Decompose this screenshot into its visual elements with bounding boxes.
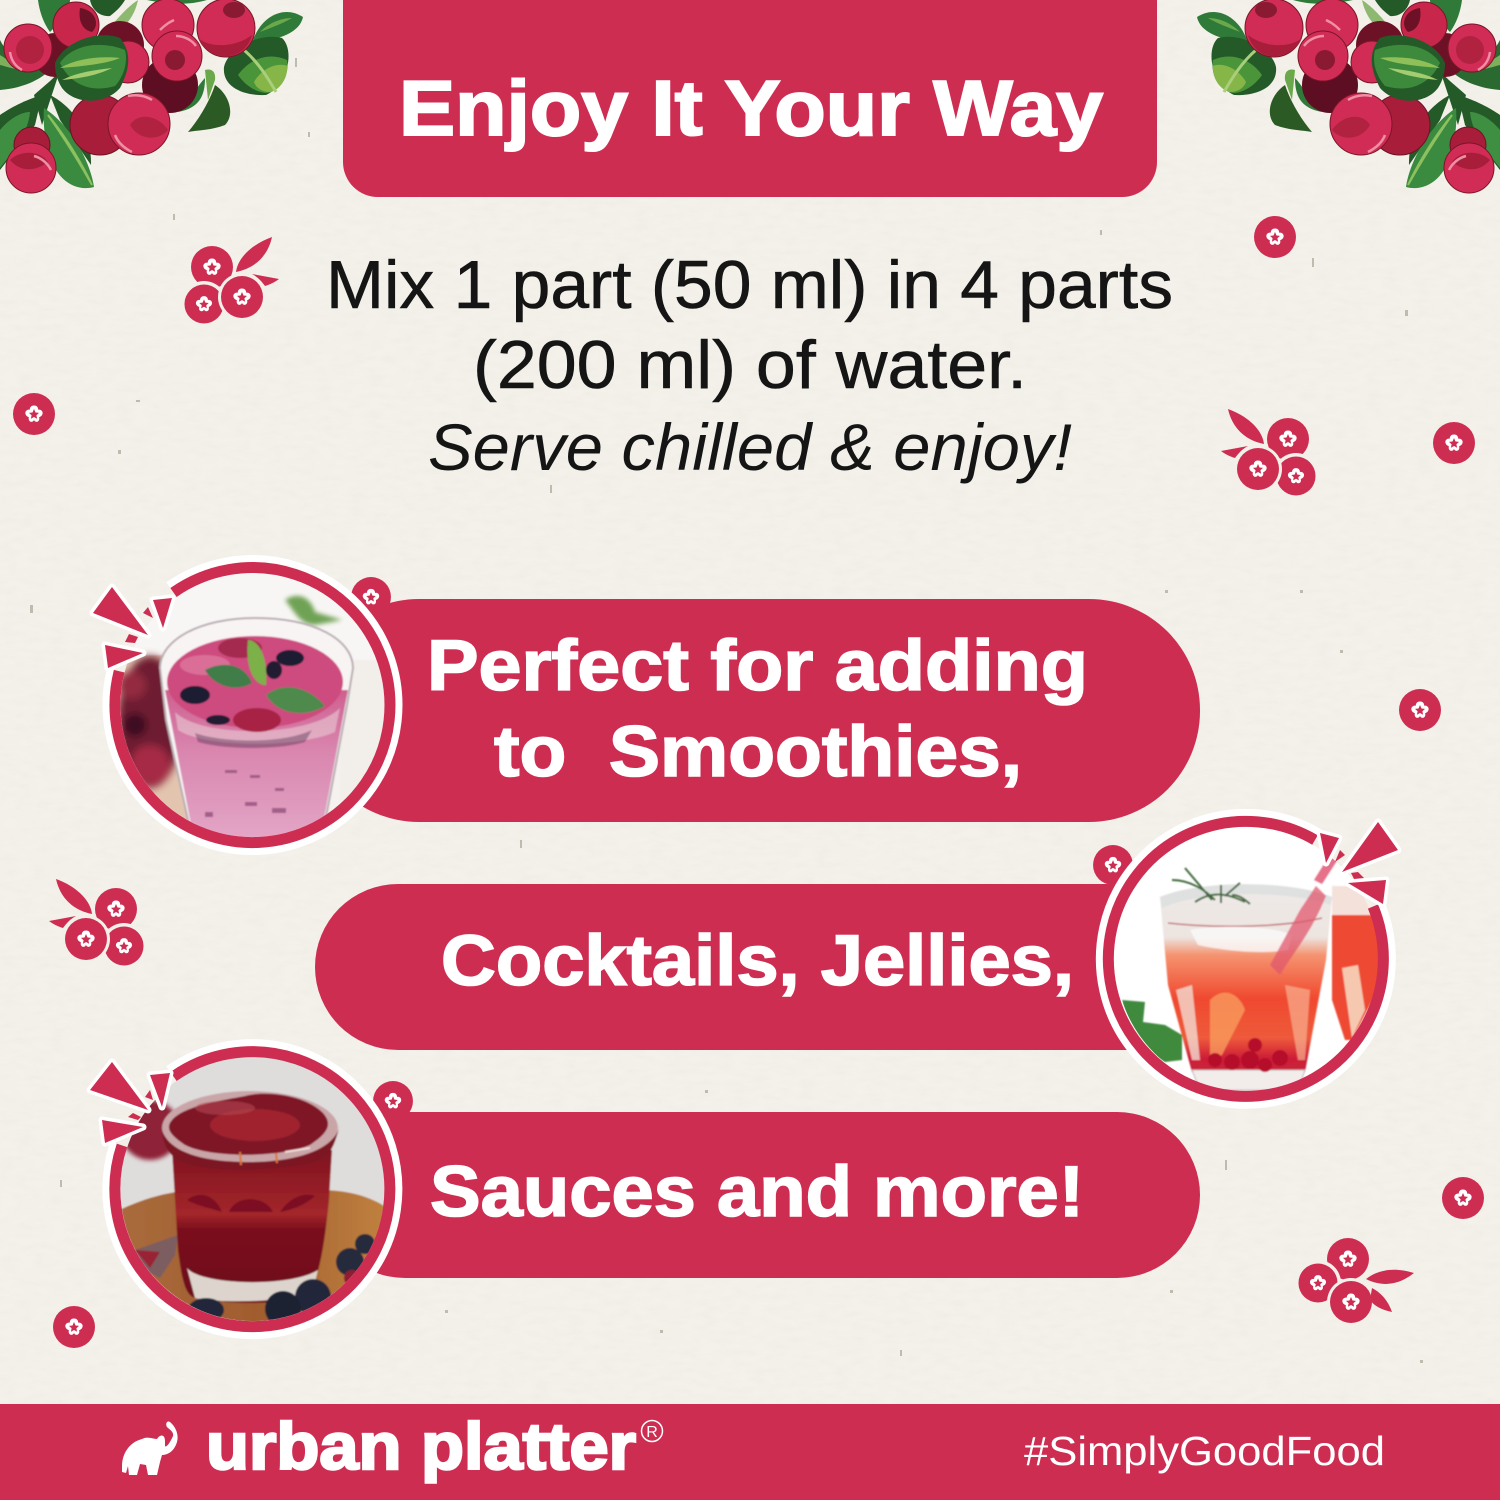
icon: berry cluster lower right [1295,1238,1414,1326]
pill text: Perfect for adding [427,627,1088,706]
title: Enjoy It Your Way [399,64,1103,152]
panel: smoothies [93,560,1200,855]
pill text: Sauces and more! [430,1153,1084,1232]
title banner [343,0,1157,197]
pill [308,599,1200,822]
icon: elephant logo [122,1421,178,1475]
icon: berry cluster right [1221,409,1319,499]
footer bar [0,1404,1500,1500]
instructions text: Mix 1 part (50 ml) in 4 parts [326,247,1173,323]
pill [315,884,1215,1050]
instructions text: (200 ml) of water. [473,327,1027,403]
decoration: top-left cranberry branch [0,0,303,193]
decorative berry badges [13,216,1484,1348]
decoration: top-right cranberry branch [1197,0,1500,193]
pill text: to Smoothies, [494,713,1022,792]
pill text: Cocktails, Jellies, [441,922,1074,1001]
pill badge [351,577,391,617]
registered mark [642,1420,662,1442]
icon: burst lines [90,1062,170,1143]
icon: berry cluster left [49,879,147,969]
hashtag: #SimplyGoodFood [1024,1428,1385,1474]
instructions text [326,247,1173,484]
icon: berry cluster beside instructions [181,237,279,327]
pill badge [373,1081,413,1121]
pill badge [1093,845,1133,885]
panel: sauces [90,1040,1200,1340]
photo: smoothie glass [110,560,400,855]
brand name: urban platter [206,1409,636,1483]
pill [322,1112,1200,1278]
icon: burst lines [1320,822,1398,904]
instructions text: Serve chilled & enjoy! [428,410,1072,484]
panel: cocktails and jellies [315,821,1398,1096]
photo: cocktail glass [1108,821,1383,1096]
registered mark: R [646,1424,658,1441]
pill text [427,627,1088,792]
photo: jam jar [110,1040,400,1340]
icon: burst lines [93,587,172,668]
